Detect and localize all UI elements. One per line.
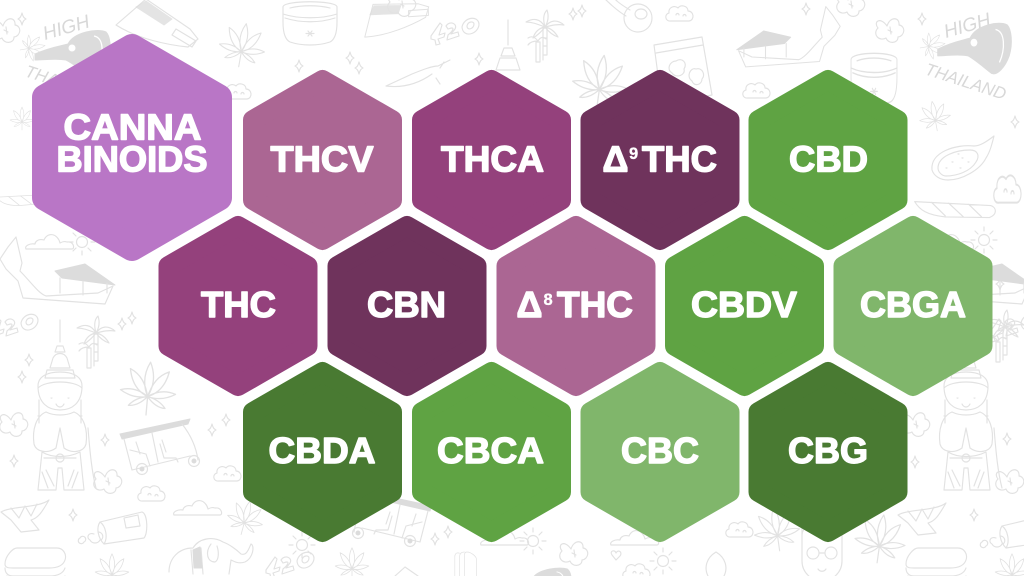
hexagon: CBDA bbox=[253, 372, 392, 532]
hexagon: CBC: CBC bbox=[621, 430, 699, 471]
hexagon: delta-8 THC bbox=[506, 226, 646, 386]
doodles: top-left bbox=[0, 0, 450, 130]
hexagon: CBG: CBG bbox=[788, 430, 868, 471]
hexagon: CBN bbox=[338, 226, 476, 386]
hexagon: delta-9 THC: Δ bbox=[602, 138, 628, 180]
hexagon: delta-9 THC: 9 bbox=[629, 145, 638, 163]
doodles: top-right: THAILAND bbox=[923, 60, 1009, 104]
hexagon: delta-8 THC: Δ bbox=[516, 284, 542, 325]
doodles: bottom-right bbox=[751, 227, 1024, 576]
hexagon: CBDV: CBDV bbox=[691, 284, 797, 325]
hexagon: CBG bbox=[758, 372, 898, 532]
hexagon: CBC bbox=[590, 372, 730, 532]
hexagon: delta-9 THC: THC bbox=[642, 138, 717, 180]
hexagon: CBCA bbox=[422, 372, 561, 532]
doodles: top-right bbox=[737, 0, 1021, 222]
hexagon: THCA bbox=[422, 80, 561, 240]
doodles: top-left: HIGH bbox=[41, 11, 92, 45]
doodles: top-middle bbox=[431, 0, 712, 112]
title text: CANNA bbox=[64, 106, 202, 148]
hexagon: CBN: CBN bbox=[367, 284, 446, 325]
hexagon: CBD: CBD bbox=[789, 138, 868, 180]
doodles: top-right: HIGH bbox=[942, 9, 993, 43]
title text: BINOIDS bbox=[56, 138, 208, 180]
hexagon: THCA: THCA bbox=[441, 138, 544, 180]
hexagon: delta-8 THC: 8 bbox=[544, 291, 553, 309]
hexagon: CBD bbox=[758, 80, 898, 240]
hexagon: delta-8 THC: THC bbox=[557, 284, 633, 325]
doodles: top-left: THAI bbox=[23, 62, 66, 92]
doodles: left-middle bbox=[0, 194, 136, 368]
doodles: bottom-middle bbox=[289, 491, 753, 576]
hexagon: CBGA bbox=[844, 226, 982, 386]
hexagon: THC bbox=[168, 226, 308, 386]
hexagon: THCV bbox=[253, 80, 392, 240]
hexagon: CBCA: CBCA bbox=[437, 430, 544, 471]
hexagon: CBDV bbox=[675, 226, 814, 386]
hexagon: CBDA: CBDA bbox=[268, 430, 376, 471]
doodles: left-bottom bbox=[0, 320, 314, 576]
hexagon: THC: THC bbox=[201, 284, 276, 325]
hexagon: delta-9 THC bbox=[590, 80, 730, 240]
hexagon: THCV: THCV bbox=[270, 138, 374, 180]
hexagon: CBGA: CBGA bbox=[860, 284, 966, 325]
hexagon: Cannabinoids title bbox=[45, 47, 219, 248]
